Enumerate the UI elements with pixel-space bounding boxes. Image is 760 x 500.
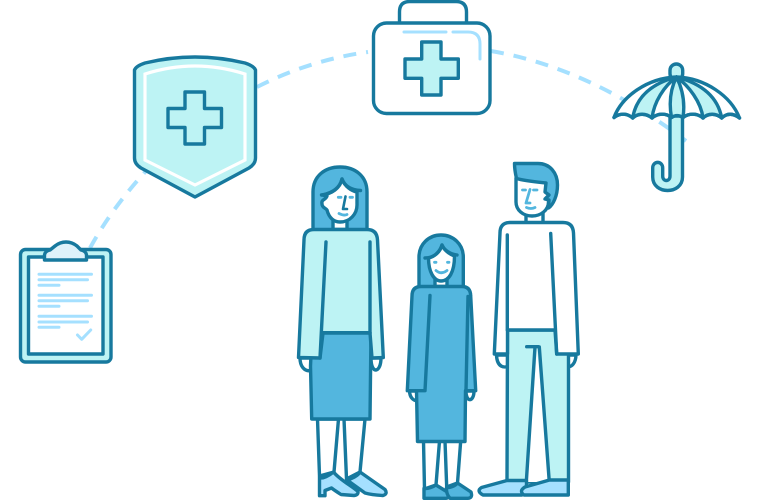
dress: [407, 286, 476, 442]
figure: man: [479, 164, 578, 495]
shoes: [320, 472, 358, 496]
head: [435, 279, 447, 286]
icon: clipboard: [20, 242, 111, 362]
icon: shield with cross: [134, 57, 256, 197]
hair: [313, 167, 367, 232]
trousers: [507, 330, 568, 482]
icon: medical kit: [374, 2, 490, 114]
legs: [424, 441, 440, 489]
hands: [410, 391, 424, 401]
shoes: [479, 480, 526, 495]
figure: child: [407, 235, 476, 498]
figure: woman: [298, 167, 386, 496]
head: [526, 213, 543, 223]
hands: [496, 355, 508, 367]
icon: umbrella: [614, 64, 740, 190]
sweater: [298, 230, 383, 358]
sweater: [494, 222, 578, 354]
skirt: [310, 333, 371, 419]
head: [333, 218, 347, 230]
hair: [514, 164, 558, 208]
legs: [318, 419, 338, 476]
dashed arc connecting the icons: [90, 51, 686, 248]
hands: [300, 358, 318, 371]
hair: [419, 235, 463, 288]
shoes: [424, 485, 449, 498]
